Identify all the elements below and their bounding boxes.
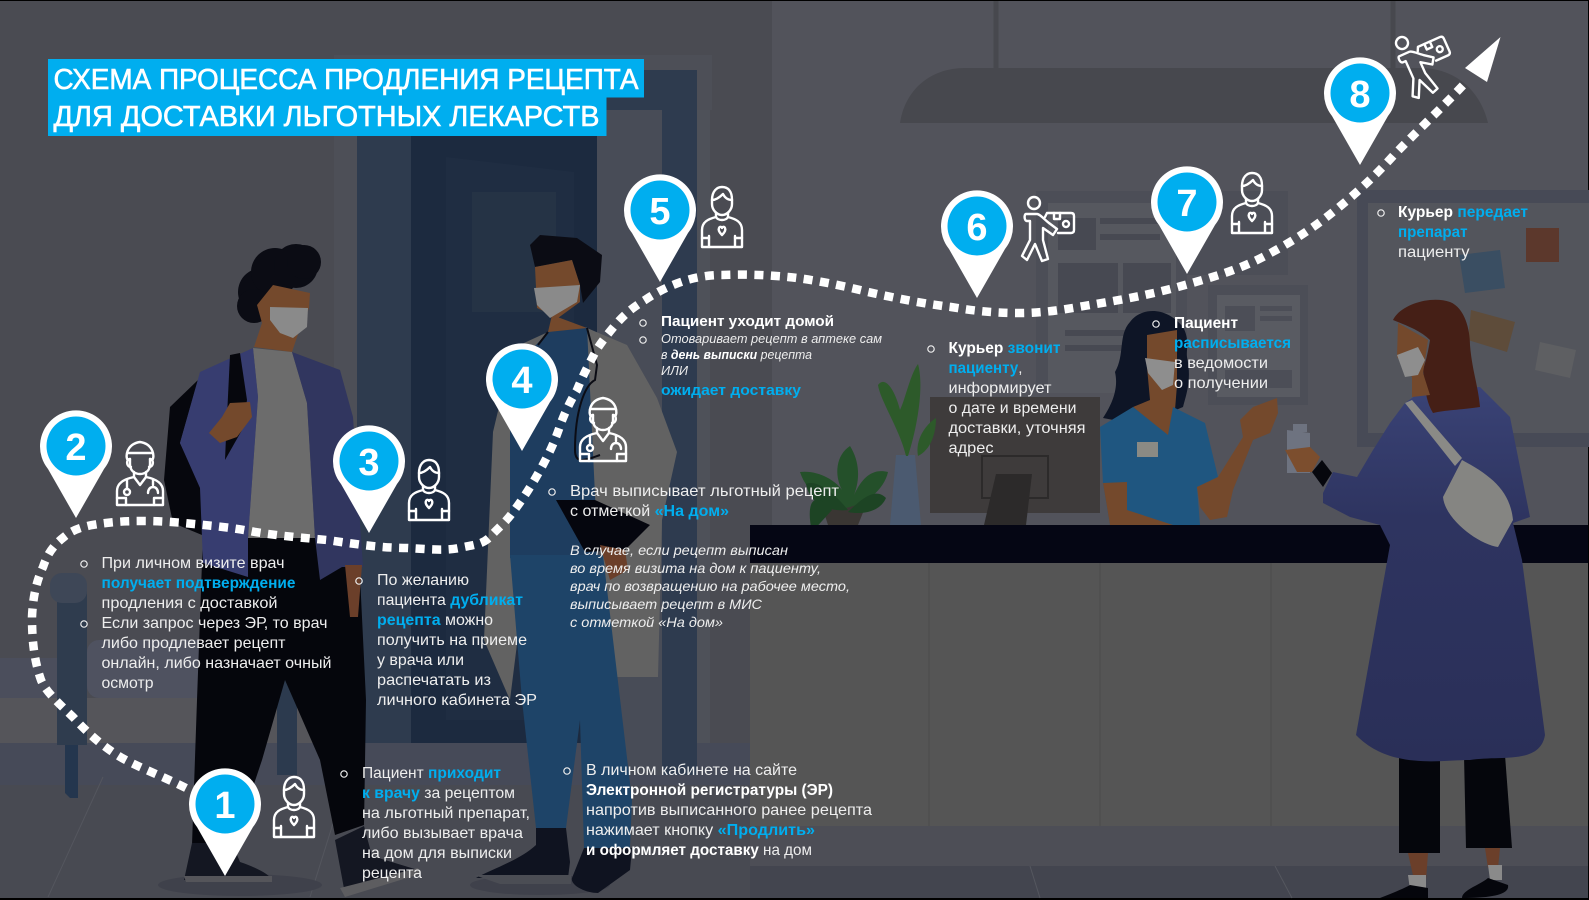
pin 2 [40,410,112,518]
title: СХЕМА ПРОЦЕССА ПРОДЛЕНИЯ РЕЦЕПТА [54,64,639,96]
pin 3: 3 [358,442,380,484]
text: step 3: у врача или [377,652,464,669]
illustration: reception monitor [930,397,1100,525]
text: step 4: с отметкой «На дом» [570,614,723,630]
icon: courier 8 [1389,21,1462,101]
icon: doctor 4 [580,398,626,461]
text: electronic registry step: Электронной регистратуры (ЭР) [586,782,833,799]
text: step 4: Врач выписывает льготный рецепт [570,483,840,500]
text: step 8 [1378,204,1528,261]
text: step 1: на льготный препарат, [362,805,530,822]
text: step 4: В случае, если рецепт выписан [570,542,788,558]
pin 5: 5 [649,191,671,233]
text: step 6: пациенту, [948,360,1022,377]
text: step 3: получить на приеме [377,632,527,649]
text: step 3: личного кабинета ЭР [377,692,537,709]
pin 4: 4 [511,360,533,402]
illustration: plant and vase [800,364,936,532]
illustration: patient at counter [1285,300,1545,898]
illustration: receptionist [1100,311,1278,525]
text: step 4: с отметкой «На дом» [570,503,729,520]
pin 6 [941,190,1013,298]
text: step 5: Отоваривает рецепт в аптеке сам [661,331,882,346]
illustration: patient with backpack [158,244,420,897]
text: step 4: выписывает рецепт в МИС [570,596,763,612]
text: step 2: Если запрос через ЭР, то врач [102,615,328,632]
text: step 1: Пациент приходит [362,765,501,782]
text: step 8: препарат [1398,224,1468,241]
pin 5 [624,174,696,282]
text: electronic registry step: напротив выписанного ранее рецепта [586,802,872,819]
text: step 5 [640,313,882,399]
pin 2: 2 [65,427,87,469]
text: step 3: пациента дубликат [377,592,523,609]
text: step 7 [1153,315,1291,392]
text: step 5: ИЛИ [661,363,689,378]
icon: patient 7 [1232,173,1272,233]
text: step 7: Пациент [1174,315,1238,332]
text: step 6: Курьер звонит [948,340,1061,357]
icon: courier 6 [1022,197,1074,261]
text: electronic registry step: и оформляет доставку на дом [586,842,812,859]
text: step 8: Курьер передает [1398,204,1528,221]
text: step 6: адрес [948,440,994,457]
text: step 1: рецепта [362,865,422,882]
text: electronic registry step: нажимает кнопку «Продлить» [586,822,815,839]
pin 8 [1324,57,1396,165]
pin 1: 1 [214,785,236,827]
text: step 7: расписывается [1174,335,1291,352]
text: step 3: По желанию [377,572,469,589]
text: step 1 [341,765,530,882]
text: step 4: во время визита на дом к пациенту, [570,560,821,576]
text: step 6: доставки, уточняя [948,420,1086,437]
text: step 4: врач по возвращению на рабочее место, [570,578,850,594]
text: step 4 [549,483,850,630]
text: step 5: в день выписки рецепта [661,347,812,362]
pin 6: 6 [966,207,988,249]
text: step 6: о дате и времени [948,400,1076,417]
dotted route [32,80,1468,788]
background: door [334,55,762,775]
text: step 3 [356,572,537,709]
background: waiting chairs [0,573,297,798]
text: step 5: Пациент уходит домой [661,313,834,330]
text: step 7: о получении [1174,375,1268,392]
illustration: doctor [470,235,677,895]
text: electronic registry step [564,762,872,859]
text: step 1: либо вызывает врача [362,825,523,842]
icon: doctor 2 [117,442,163,505]
text: step 2: онлайн, либо назначает очный [102,655,332,672]
text: step 1: к врачу за рецептом [362,785,515,802]
pin 1 [189,768,261,876]
text: step 1: на дом для выписки [362,845,512,862]
text: step 2 [81,555,332,692]
text: step 2: осмотр [102,675,154,692]
title: ДЛЯ ДОСТАВКИ ЛЬГОТНЫХ ЛЕКАРСТВ [54,101,600,133]
title [48,59,644,136]
hair [237,244,321,323]
illustration: counter [750,525,1588,826]
arrowhead [1465,37,1500,82]
text: step 2: получает подтверждение [102,575,296,592]
icon: patient 1 [274,777,314,837]
text: step 2: продления с доставкой [102,595,278,612]
background: floor [0,698,1588,898]
text: step 6: информирует [948,380,1052,397]
pin 7: 7 [1176,183,1198,225]
pin 7 [1151,166,1223,274]
text: step 5: ожидает доставку [661,382,802,399]
background: ceiling lamp [900,1,1488,123]
pin 4 [486,343,558,451]
text: step 2: либо продлевает рецепт [102,635,286,652]
icon: patient 3 [409,460,449,520]
icon: patient 5 [702,187,742,247]
text: step 2: При личном визите врач [102,555,284,572]
text: electronic registry step: В личном кабинете на сайте [586,762,797,779]
text: step 3: рецепта можно [377,612,493,629]
text: step 3: распечатать из [377,672,491,689]
text: step 7: в ведомости [1174,355,1268,372]
background: notice boards [1036,190,1589,447]
pin 3 [333,425,405,533]
text: step 8: пациенту [1398,244,1470,261]
pin 8: 8 [1349,74,1371,116]
text: step 6 [928,340,1086,457]
